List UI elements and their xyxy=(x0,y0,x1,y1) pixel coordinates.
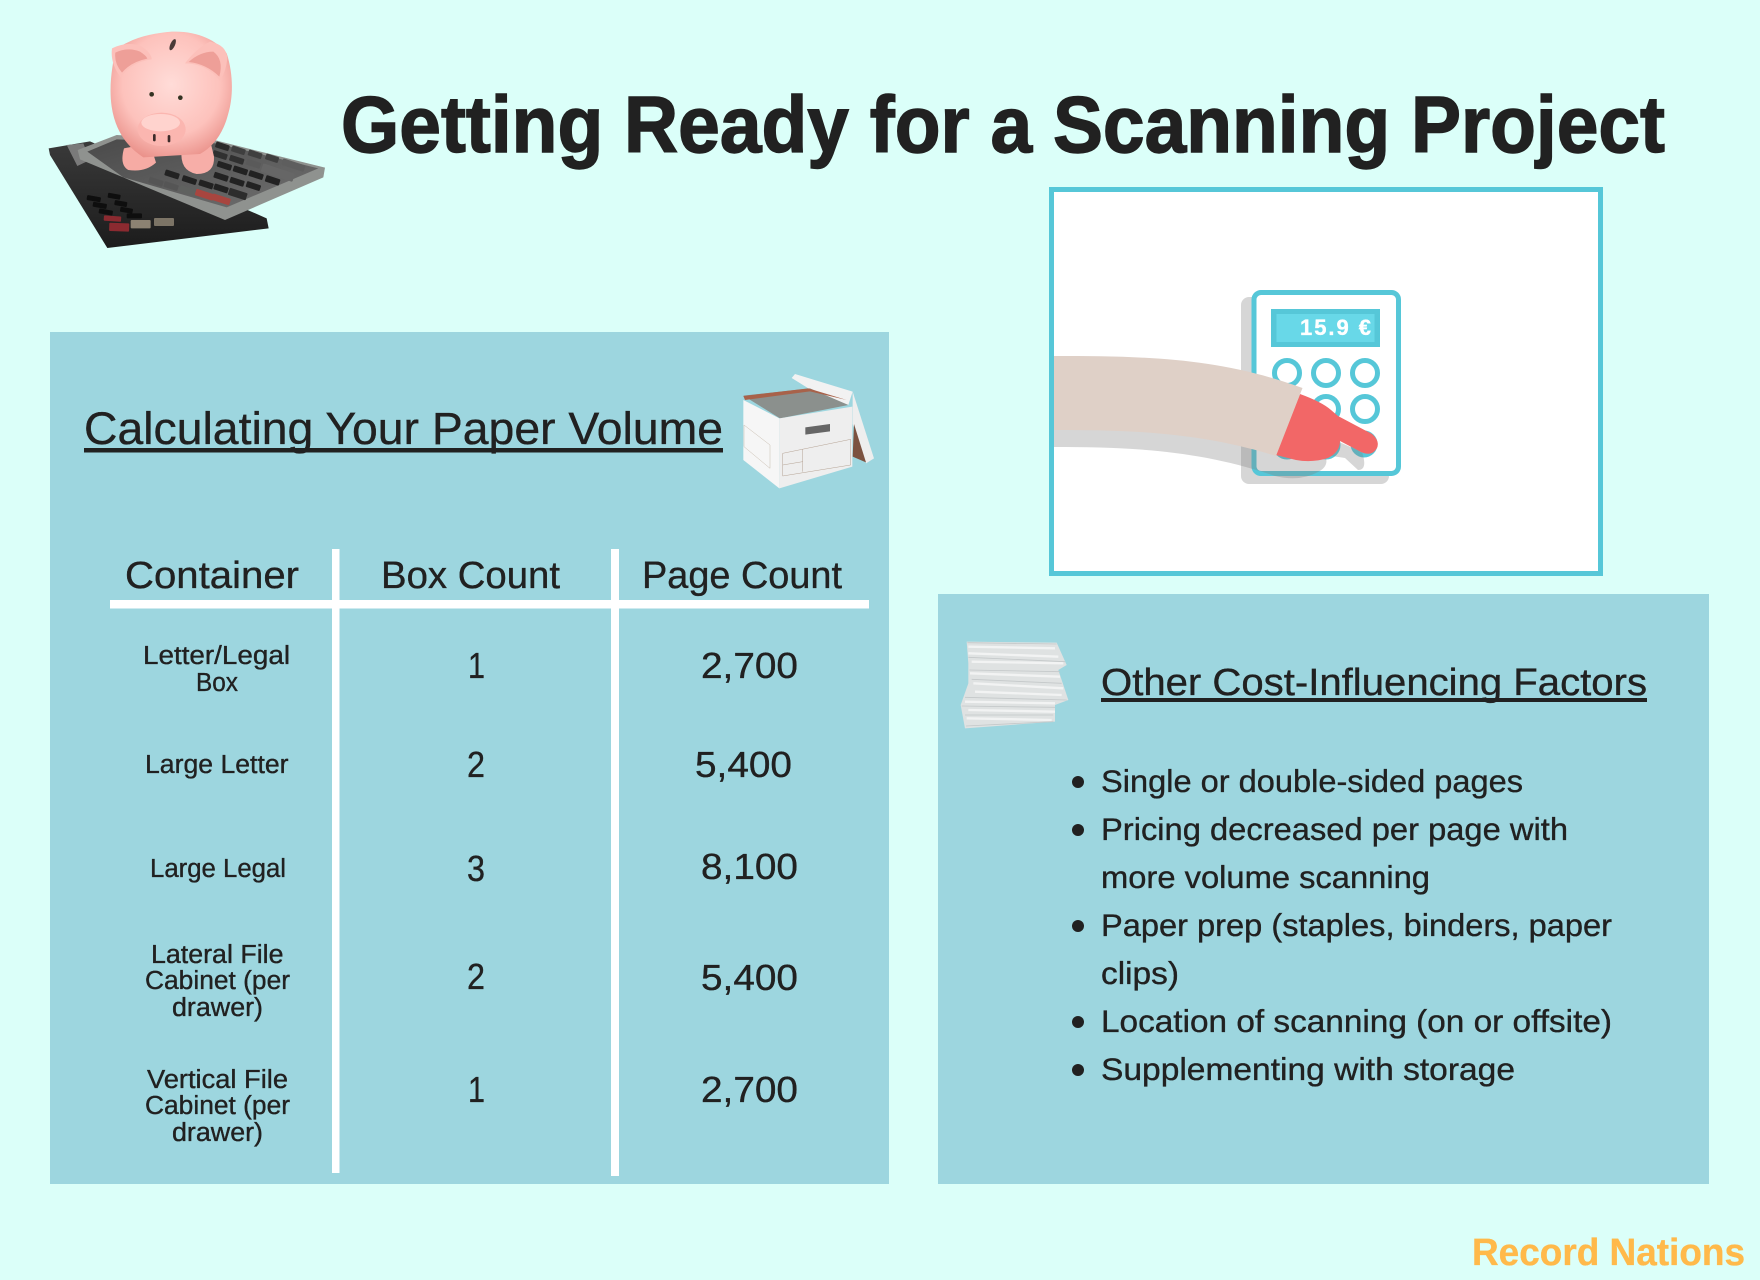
icon: stack of paper xyxy=(961,642,1068,728)
calculator display xyxy=(1271,309,1380,347)
box count column: 2 xyxy=(467,744,485,785)
container column: Lateral File xyxy=(151,941,284,969)
page count column xyxy=(695,645,798,1110)
bullet list: more volume scanning xyxy=(1101,859,1430,895)
column headers: Page Count xyxy=(642,555,842,597)
box count column: 1 xyxy=(468,645,485,686)
container column: Vertical File xyxy=(147,1066,288,1094)
container column: Large Legal xyxy=(150,855,286,883)
display reading: 15.9 € xyxy=(1300,315,1371,340)
illustration: hand pressing calculator xyxy=(1052,190,1600,574)
upper grey calculator xyxy=(78,135,325,220)
page count column: 5,400 xyxy=(695,744,792,785)
calculator body xyxy=(1254,292,1398,474)
page count column: 8,100 xyxy=(701,846,798,887)
container column: drawer) xyxy=(172,994,263,1022)
pointing hand xyxy=(1276,394,1378,461)
box count column: 1 xyxy=(468,1069,485,1110)
bullet list: Pricing decreased per page with xyxy=(1101,811,1568,847)
calculator shadow xyxy=(1241,297,1389,484)
box count column: 2 xyxy=(467,956,485,997)
icon: piggy bank on calculators xyxy=(49,32,325,248)
bullet list: Paper prep (staples, binders, paper xyxy=(1101,907,1612,943)
page count column: 2,700 xyxy=(701,1069,798,1110)
frame xyxy=(1052,190,1600,574)
column headers xyxy=(125,555,842,597)
container column xyxy=(143,642,291,1147)
panel heading: Calculating Your Paper Volume xyxy=(84,403,723,454)
title: Getting Ready for a Scanning Project xyxy=(341,80,1665,169)
panel heading: Other Cost-Influencing Factors xyxy=(1101,662,1647,704)
page count column: 2,700 xyxy=(701,645,798,686)
container column: Cabinet (per xyxy=(145,1092,291,1120)
page count column: 5,400 xyxy=(701,957,798,998)
hand and arm shadow xyxy=(1054,425,1364,478)
box count column: 3 xyxy=(467,848,485,889)
container column: Letter/Legal xyxy=(143,642,290,670)
panel: calculating your paper volume xyxy=(50,332,889,1184)
panel: other cost-influencing factors xyxy=(938,594,1709,1184)
column headers: Container xyxy=(125,555,299,597)
calculator buttons xyxy=(1274,360,1378,457)
container column: drawer) xyxy=(172,1119,263,1147)
icon: file box xyxy=(743,374,874,488)
brand credit: Record Nations xyxy=(1472,1232,1745,1274)
table: container, box and page counts xyxy=(110,549,869,1176)
container column: Box xyxy=(196,669,238,697)
sleeve xyxy=(1054,356,1302,456)
box count column xyxy=(467,645,485,1110)
bullet list: Supplementing with storage xyxy=(1101,1051,1515,1087)
table rules xyxy=(110,549,869,1176)
bullet list: Location of scanning (on or offsite) xyxy=(1101,1003,1612,1039)
bullet list: clips) xyxy=(1101,955,1179,991)
column headers: Box Count xyxy=(381,555,560,597)
container column: Cabinet (per xyxy=(145,967,291,995)
container column: Large Letter xyxy=(145,751,289,779)
piggy bank xyxy=(111,32,232,174)
bullet list xyxy=(1072,763,1612,1087)
lower black calculator xyxy=(49,141,269,248)
bullet list: Single or double-sided pages xyxy=(1101,763,1523,799)
